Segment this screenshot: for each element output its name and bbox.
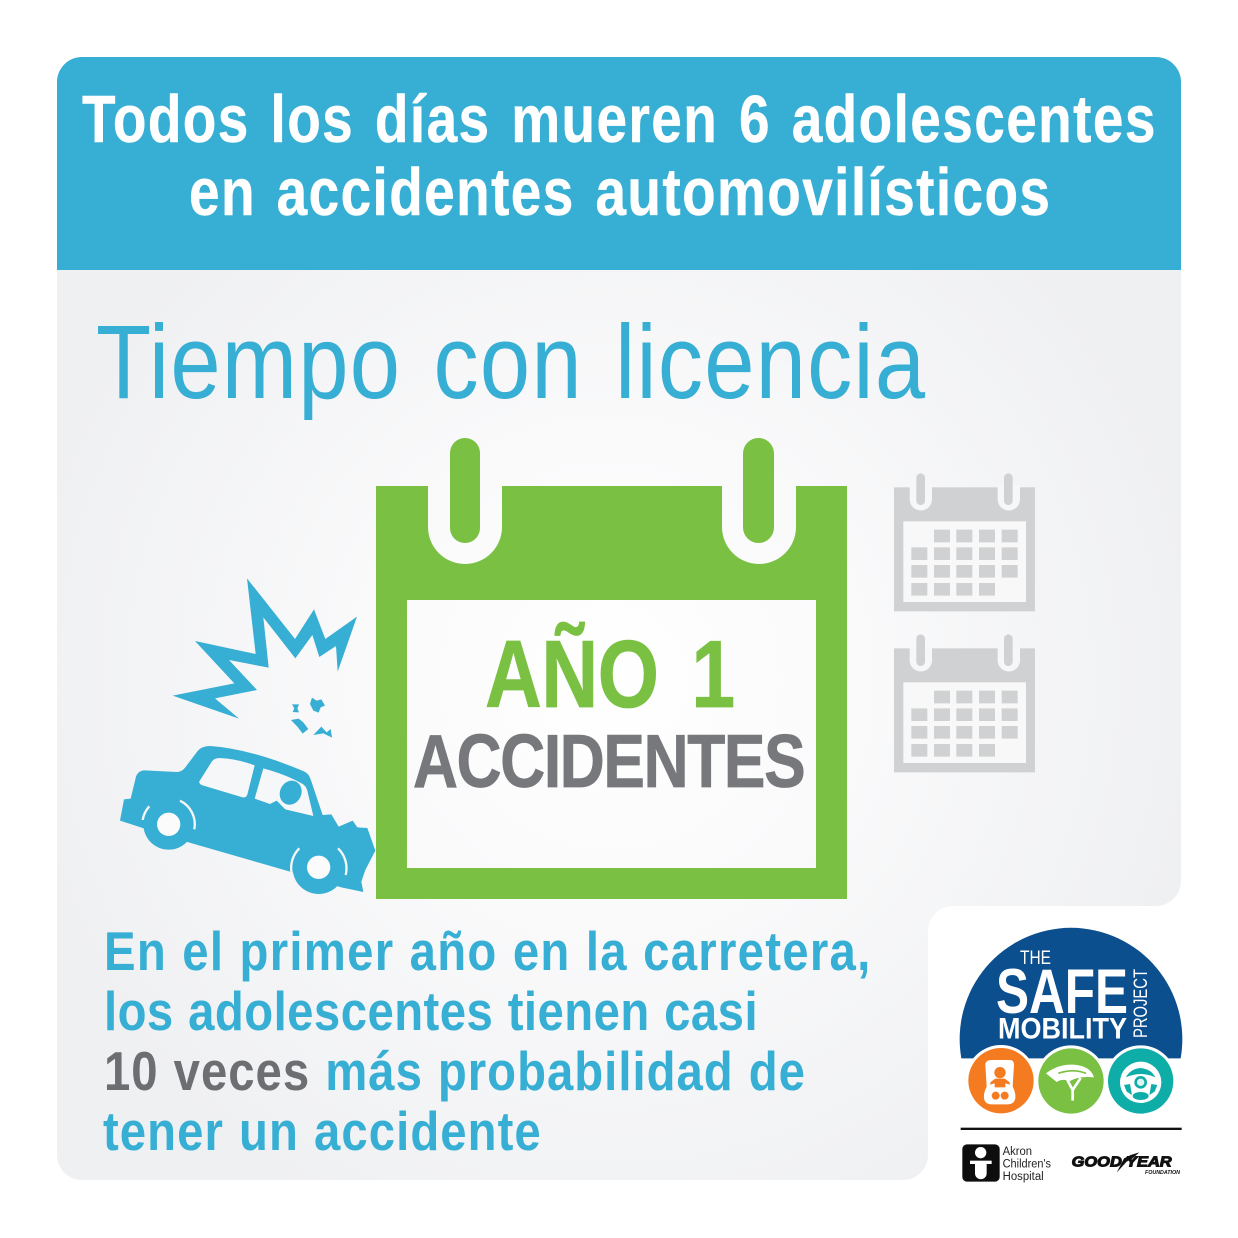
logo: Goodyear Foundation: FOUNDATION: [1145, 1170, 1181, 1176]
calendar label: year: AÑO 1: [485, 621, 735, 728]
logo wordmark: [996, 948, 1152, 1046]
icon: small calendar 1: [894, 473, 1035, 611]
logo: Akron Children's Hospital: [962, 1144, 1051, 1183]
logo wordmark: PROJECT: [1131, 969, 1152, 1038]
text block: statistic: los adolescentes tienen casi: [104, 981, 758, 1042]
icon: child seat: [965, 1045, 1037, 1116]
panel: main background: [57, 260, 1181, 1180]
logo wordmark: SAFE: [996, 957, 1128, 1027]
text block: statistic: tener un accidente: [103, 1101, 541, 1162]
logo: Akron Children's Hospital: Hospital: [1003, 1169, 1044, 1183]
icon: steering wheel: [1105, 1045, 1176, 1117]
icon: large green calendar: [376, 438, 847, 899]
logo divider: [961, 1128, 1182, 1130]
logo: Akron Children's Hospital: Children's: [1003, 1157, 1051, 1171]
panel: header banner: [57, 57, 1181, 270]
logo: Goodyear Foundation: GOOD YEAR: [1072, 1155, 1172, 1171]
section title: Tiempo con licencia: [96, 303, 926, 421]
logo wordmark: MOBILITY: [998, 1013, 1127, 1046]
heading line 2: en accidentes automovilísticos: [189, 155, 1050, 229]
heading line 1: Todos los días mueren 6 adolescentes: [82, 82, 1155, 156]
car body: [120, 746, 375, 892]
icon: small calendar 2: [894, 634, 1035, 772]
driver head: [276, 777, 306, 808]
icon: crash burst and car: [120, 578, 375, 894]
logo: Akron Children's Hospital: Akron: [1003, 1144, 1032, 1158]
logo dome: [960, 928, 1182, 1058]
icon: bike helmet: [1035, 1045, 1107, 1117]
front wheel: [291, 842, 346, 894]
text block: statistic: En el primer año en la carretera,: [104, 921, 870, 982]
calendar label: crashes: ACCIDENTES: [413, 720, 806, 803]
burst: [173, 578, 357, 719]
debris: [291, 698, 332, 738]
rear wheel: [143, 799, 195, 850]
text block: statistic: [103, 921, 870, 1162]
logo wordmark: THE: [1020, 948, 1051, 969]
logo: Goodyear Foundation: [1072, 1152, 1181, 1176]
text block: statistic: 10 veces más probabilidad de: [104, 1041, 805, 1102]
logo: Safe Mobility Project: [960, 928, 1182, 1183]
car windows: [199, 758, 255, 797]
